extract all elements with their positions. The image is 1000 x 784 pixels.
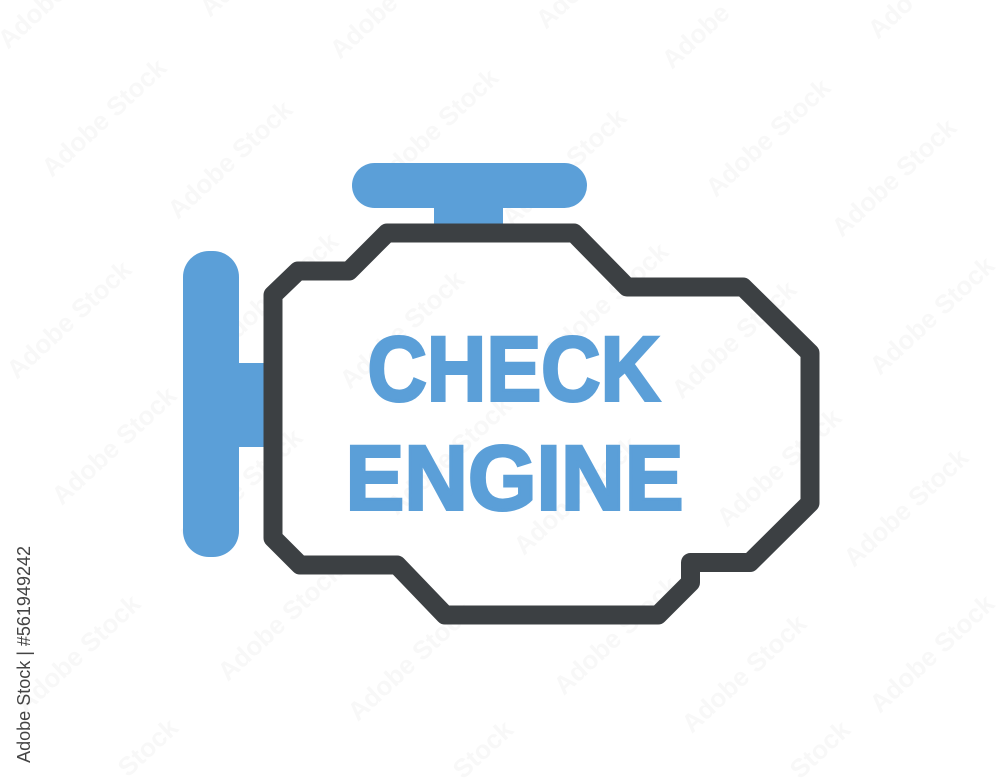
background watermark pattern: Adobe Stock	[1, 254, 138, 385]
background watermark pattern: Adobe Stock	[864, 588, 1000, 719]
background watermark pattern: Adobe Stock	[666, 274, 803, 405]
background watermark pattern: Adobe Stock	[212, 556, 349, 687]
label: check engine	[346, 318, 684, 530]
background watermark pattern: Stock	[112, 712, 184, 782]
background watermark pattern: Adobe Stock	[508, 430, 645, 561]
background watermark pattern: Adobe Stock	[826, 112, 963, 243]
background watermark pattern: Adobe Stock	[711, 402, 848, 533]
background watermark pattern: Adobe Stock	[381, 390, 518, 521]
stock id caption: Adobe Stock | #561949242	[14, 546, 34, 763]
icon: engine	[183, 163, 810, 615]
background watermark pattern: Adobe Stock	[676, 608, 813, 739]
background watermark pattern: Adobe Stock	[172, 422, 309, 553]
background watermark pattern: Adobe Stock	[342, 596, 479, 727]
background watermark pattern: Adobe Stock	[700, 72, 837, 203]
label: check engine: ENGINE	[346, 428, 684, 530]
background watermark pattern: Adobe Stock	[368, 62, 505, 193]
engine top cap	[352, 163, 587, 227]
background watermark pattern: Stock	[447, 714, 519, 784]
background watermark pattern: Adobe Stock	[46, 380, 183, 511]
background watermark pattern: Adobe Stock	[496, 102, 633, 233]
engine left handle	[183, 251, 267, 557]
background watermark pattern: Adobe Stock	[838, 442, 975, 573]
background watermark pattern: Adobe Stock	[538, 236, 675, 367]
background watermark pattern: Adobe Stock	[548, 570, 685, 701]
label: check engine: CHECK	[368, 318, 660, 420]
engine outline	[273, 233, 810, 615]
background watermark pattern: Adobe Stock	[36, 52, 173, 183]
background watermark pattern: Adobe Stock	[208, 226, 345, 357]
background watermark pattern: Adobe Stock	[162, 94, 299, 225]
background watermark pattern: Adobe Stock	[334, 264, 471, 395]
background watermark pattern: Stock	[784, 714, 856, 784]
background watermark pattern: Adobe Stock	[864, 250, 1000, 381]
background watermark pattern: Adobe Stock	[10, 588, 147, 719]
